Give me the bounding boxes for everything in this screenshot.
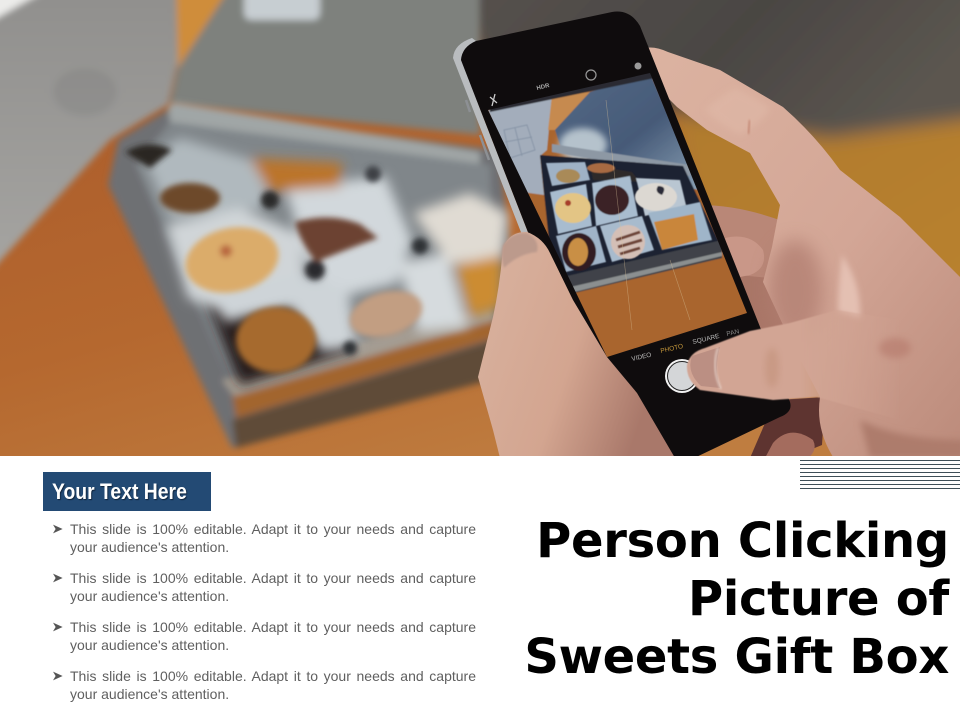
bullet 4: This slide is 100% editable. Adapt it to your needs and capture your audience's attention.	[70, 668, 476, 702]
photo: person photographing a sweets gift box with a phone	[0, 0, 960, 456]
bullet 3: This slide is 100% editable. Adapt it to your needs and capture your audience's attention.	[70, 619, 476, 653]
phone camera viewfinder showing sweets box	[488, 73, 747, 357]
title: Person Clicking	[536, 513, 949, 569]
phone camera interface labels and shutter button	[490, 62, 740, 393]
left hand thumb holding phone	[478, 232, 675, 458]
phone camera interface labels and shutter button: PAN	[726, 328, 740, 338]
title: Sweets Gift Box	[524, 629, 949, 685]
phone camera interface labels and shutter button: PHOTO	[660, 343, 684, 355]
phone camera interface labels and shutter button: SQUARE	[692, 333, 721, 346]
blurred background: table, box, lid	[0, 0, 960, 456]
right thumb on shutter	[687, 310, 911, 420]
bullet list	[53, 521, 476, 702]
right hand palm, index and middle fingers behind phone	[645, 48, 960, 460]
bullet 1: This slide is 100% editable. Adapt it to your needs and capture your audience's attention.	[70, 521, 476, 555]
smartphone body	[453, 12, 791, 460]
heading badge: Your Text Here	[43, 472, 211, 511]
title	[524, 513, 950, 685]
heading badge: Your Text Here: Your Text Here	[52, 479, 187, 504]
paper cups and sweets inside the phone screen	[546, 162, 712, 272]
title: Picture of	[688, 571, 949, 627]
striped decoration	[800, 460, 960, 489]
phone camera interface labels and shutter button: VIDEO	[631, 352, 652, 363]
bullet 2: This slide is 100% editable. Adapt it to your needs and capture your audience's attention.	[70, 570, 476, 604]
gift box with blurred sweets	[108, 102, 520, 448]
phone camera interface labels and shutter button: HDR	[536, 83, 551, 92]
